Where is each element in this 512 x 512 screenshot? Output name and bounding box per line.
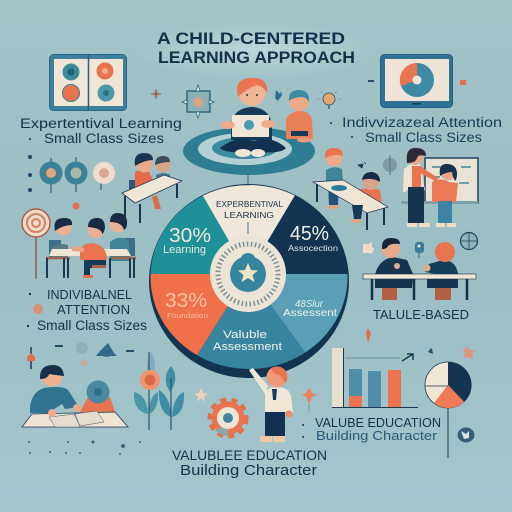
pie chart icon, lower right xyxy=(425,362,472,458)
text: left experiential learning: Expertentival Learning xyxy=(20,116,182,131)
icons: row of target circles xyxy=(28,155,115,210)
icon: tablet with pie chart xyxy=(380,54,452,108)
rug xyxy=(183,127,315,175)
text: right individualized attention xyxy=(330,115,502,145)
illustration: pupils at desk, upper right xyxy=(313,148,388,230)
icon: framed diamond xyxy=(182,85,214,118)
child head xyxy=(237,78,267,106)
segment: 33% foundation: 33% xyxy=(165,290,207,312)
icon: spiral target on stand xyxy=(22,209,50,279)
text: right individualized attention: Indivvizazeal Attention xyxy=(342,115,502,130)
icon: gear xyxy=(210,400,246,436)
segment: 45% association xyxy=(268,196,338,251)
bar chart xyxy=(332,348,418,408)
pie chart xyxy=(149,184,349,378)
text: left experiential learning: Small Class Sizes xyxy=(44,131,164,146)
segment: valuable assessment: Valuble xyxy=(223,329,267,341)
segment: 30% learning: Learning xyxy=(163,244,206,256)
icon: small blue shape xyxy=(275,90,282,101)
icon: puzzle piece xyxy=(363,242,374,254)
title: A CHILD-CENTERED xyxy=(157,30,345,48)
student xyxy=(432,164,458,227)
marker: small red pin xyxy=(366,328,371,343)
bars xyxy=(349,369,401,407)
text: left individualised attention: INDIVIBALNEL xyxy=(47,288,132,302)
illustration: two pupils at long table xyxy=(363,238,476,300)
pointer line from rug to pie xyxy=(247,175,249,234)
text: table-based: TALULE-BASED xyxy=(373,308,469,322)
illustration: child writing at desk xyxy=(22,365,128,427)
desk xyxy=(313,180,388,213)
illustration: central child on rug xyxy=(183,78,315,175)
decorative markers near tablet xyxy=(368,80,466,85)
title: LEARNING APPROACH xyxy=(158,49,355,67)
text: left experiential learning xyxy=(20,116,182,146)
segment: assessment right: 48Slur xyxy=(295,299,324,310)
text: value education right: VALUBE EDUCATION xyxy=(315,416,441,430)
dotted marks under desk xyxy=(28,440,141,455)
segment: 33% foundation: Foundation xyxy=(167,313,208,320)
segment: experiential learning xyxy=(202,185,295,242)
segment: experiential learning: LEARNING xyxy=(224,210,274,220)
icon: plants with orange bloom xyxy=(134,352,184,430)
title xyxy=(136,22,376,78)
text: value education right: Building Character xyxy=(316,429,437,443)
icon: open book panel, top left xyxy=(50,54,126,110)
icon: small pin, lower left xyxy=(27,347,35,369)
text: value education bottom: VALUBLEE EDUCATION xyxy=(172,448,327,463)
segment: 30% learning: 30% xyxy=(169,225,211,247)
icon: small flower, top right of chart xyxy=(428,347,475,359)
text: left individualised attention: ATTENTION xyxy=(57,303,130,317)
illustration: two pupils at desk, upper left xyxy=(122,153,182,223)
text: right individualized attention: Small Class Sizes xyxy=(365,130,482,145)
illustration: teacher and student at whiteboard xyxy=(401,148,478,227)
illustration: three pupils at table xyxy=(46,213,136,278)
text: left individualised attention: Small Class Sizes xyxy=(37,318,147,333)
illustration: child seated right of rug xyxy=(286,90,313,142)
whiteboard xyxy=(401,158,478,204)
text: value education bottom: Building Character xyxy=(180,462,317,479)
teacher xyxy=(403,148,438,227)
laptop xyxy=(221,115,275,137)
segment: 33% foundation xyxy=(150,274,228,356)
icons: faded star shapes xyxy=(55,342,134,366)
segment: experiential learning: EXPERBENTIVAL xyxy=(216,199,283,209)
segment: assessment right: Assessent xyxy=(283,307,337,319)
icon: small star xyxy=(194,388,208,402)
icon: lightbulb xyxy=(317,91,341,109)
icon: small sun badge xyxy=(151,89,161,99)
text: left individualised attention xyxy=(27,288,147,333)
centre badge xyxy=(210,236,286,312)
icon: globe-like blob xyxy=(458,428,474,442)
segment: valuable assessment: Assessment xyxy=(213,341,282,353)
segment: valuable assessment xyxy=(197,304,305,369)
icon: small robot xyxy=(415,242,424,258)
text: value education right xyxy=(302,416,441,443)
child body xyxy=(220,107,286,157)
illustration: teacher pointing at pie xyxy=(249,366,293,442)
icon: small orange flower xyxy=(302,388,317,412)
text: value education bottom xyxy=(172,448,327,479)
segment: 45% association: 45% xyxy=(290,223,329,245)
icon: compass circle xyxy=(460,232,478,250)
segment: 30% learning xyxy=(150,196,229,274)
segment: assessment right xyxy=(270,274,348,352)
icon: lantern xyxy=(358,155,397,175)
segment: 45% association: Assocection xyxy=(288,243,338,253)
